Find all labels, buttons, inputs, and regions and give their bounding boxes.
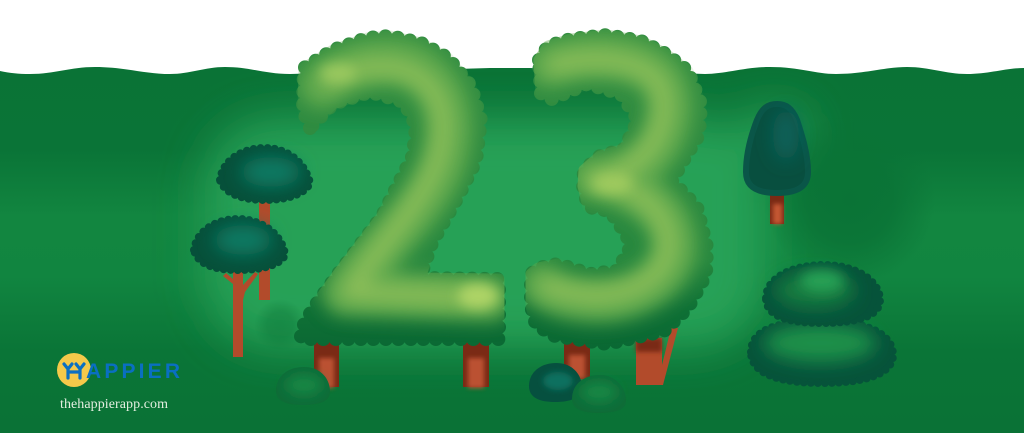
logo wordmark: APPIER	[86, 360, 180, 383]
stacked bushes on the right	[751, 265, 893, 383]
logo H icon	[64, 364, 84, 378]
upper bush	[766, 265, 880, 323]
canopy	[746, 104, 808, 193]
trunk	[770, 194, 784, 224]
conifer tree on the right	[746, 104, 808, 224]
topiary number 2	[301, 36, 499, 339]
teal bush under the number 3	[529, 363, 582, 402]
lower bush	[751, 321, 893, 383]
rear trunk	[259, 200, 270, 300]
trunks of the number 2	[314, 342, 489, 388]
small bush by the number 2	[276, 367, 330, 405]
website address: thehappierapp.com	[60, 397, 168, 412]
tree: double canopy on the left	[194, 148, 310, 357]
logo circle	[57, 353, 91, 387]
trunks of the number 3	[564, 328, 678, 385]
green bush under the number 3	[572, 375, 626, 413]
upper canopy	[220, 148, 310, 200]
logo: Happier	[57, 353, 180, 387]
topiary number 3	[531, 35, 707, 344]
lower canopy	[194, 219, 285, 270]
front trunk with branches	[223, 272, 258, 357]
